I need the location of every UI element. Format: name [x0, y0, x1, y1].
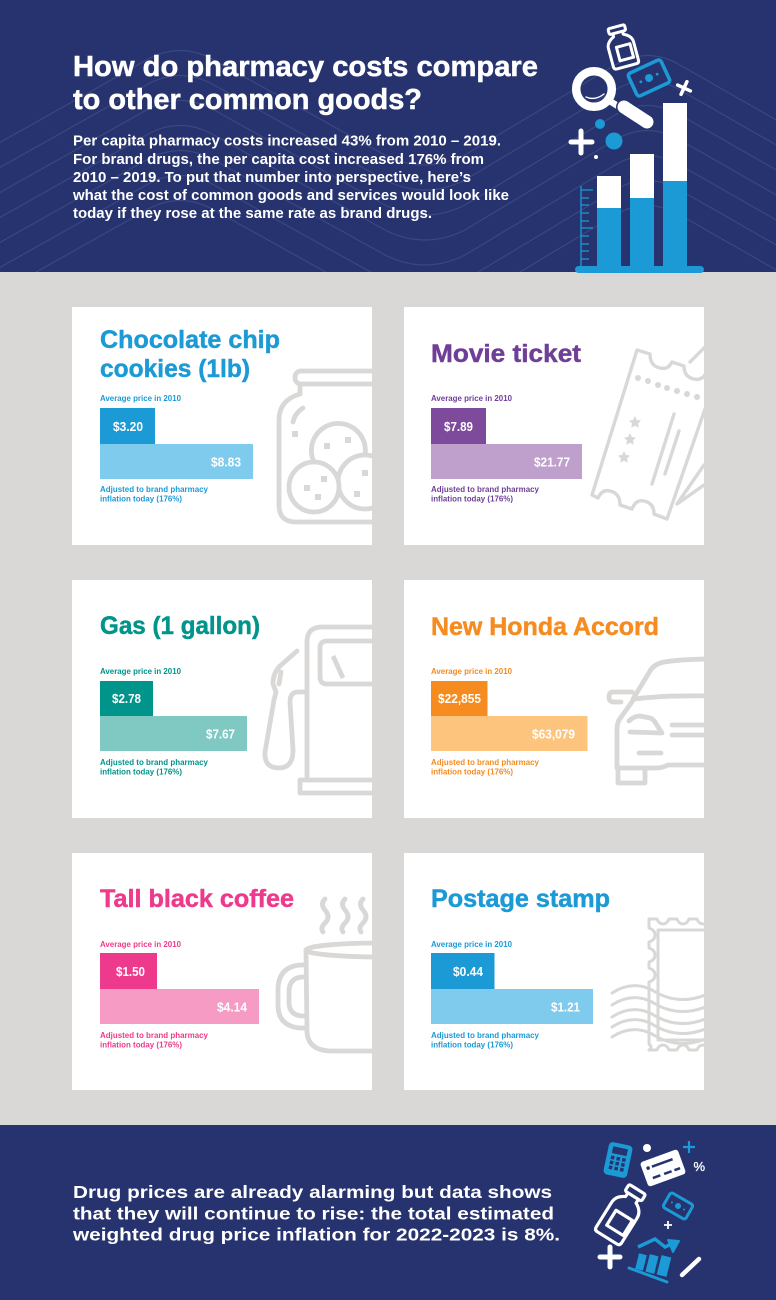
label: adjusted price: Adjusted to brand pharmacy	[100, 758, 209, 767]
label: adjusted price: Adjusted to brand pharmacy	[431, 1031, 540, 1040]
intro text: Per capita pharmacy costs increased 43% from 2010 – 2019.	[73, 134, 501, 150]
label: adjusted price: inflation today (176%)	[100, 768, 182, 776]
panel: new honda accord	[404, 580, 712, 818]
bar chart: $1.50	[116, 965, 145, 979]
icon: ticket	[592, 342, 716, 519]
heading: Postage stamp	[431, 886, 610, 913]
heading: Chocolate chip	[100, 327, 280, 354]
label: adjusted price: inflation today (176%)	[100, 1040, 182, 1050]
icon: stamp with postmark	[612, 919, 712, 1050]
panel: postage stamp	[404, 853, 712, 1090]
heading: cookies (1lb)	[100, 356, 250, 383]
icon: gas pump	[265, 627, 380, 793]
plus signs, dots, percent and slash	[600, 1141, 706, 1275]
heading	[100, 327, 280, 383]
bar chart: $22,855	[438, 692, 481, 706]
bar chart: $7.67	[206, 728, 235, 742]
footer text	[72, 1182, 560, 1244]
plus signs, dots, percent and slash: %	[694, 1159, 706, 1174]
label: average price: Average price in 2010	[431, 394, 513, 403]
bar chart: $21.77	[534, 456, 570, 470]
intro text	[72, 134, 509, 222]
title: to other common goods?	[73, 84, 422, 116]
bars	[575, 103, 704, 273]
heading: Movie ticket	[431, 341, 581, 368]
icon: pill bottle	[594, 1181, 650, 1246]
label: average price: Average price in 2010	[100, 940, 182, 949]
bar chart	[100, 681, 247, 751]
decorative plus signs and dots	[571, 79, 693, 159]
icon: cookie jar	[276, 368, 372, 524]
panel: tall black coffee	[72, 853, 372, 1090]
panel: movie ticket	[404, 307, 716, 545]
bar chart: $3.20	[113, 420, 143, 434]
bar chart	[100, 953, 259, 1024]
bar chart: $1.21	[551, 1000, 580, 1014]
label: adjusted price: inflation today (176%)	[100, 494, 182, 504]
bar chart	[431, 408, 582, 479]
label: average price: Average price in 2010	[431, 667, 513, 676]
bar chart: $0.44	[453, 965, 483, 979]
bar chart: $4.14	[217, 1000, 247, 1014]
bar chart: $7.89	[444, 420, 473, 434]
icon: magnifier	[576, 71, 647, 122]
header banner	[0, 0, 776, 272]
intro text: 2010 – 2019. To put that number into perspective, here’s	[73, 170, 471, 186]
label: adjusted price: Adjusted to brand pharmacy	[431, 758, 540, 767]
icon: money	[627, 59, 671, 97]
bar chart	[431, 953, 593, 1024]
ruler	[581, 186, 593, 267]
icon: rising bar chart with magnifier and pill bottle	[571, 23, 704, 273]
icon: growth chart	[629, 1239, 679, 1282]
icon: money	[662, 1192, 694, 1220]
footer text: that they will continue to rise: the total estimated	[73, 1204, 554, 1224]
footer banner	[0, 1125, 776, 1300]
label: adjusted price	[431, 1031, 540, 1050]
icon: finance and medicine cluster	[594, 1141, 706, 1282]
icon: pill bottle	[604, 23, 639, 70]
icon: car	[609, 659, 712, 783]
panel: gas	[72, 580, 380, 818]
bar chart	[431, 681, 588, 751]
label: adjusted price	[100, 485, 209, 504]
title	[73, 51, 538, 116]
label: adjusted price: Adjusted to brand pharmacy	[100, 485, 209, 494]
label: adjusted price: Adjusted to brand pharmacy	[431, 485, 540, 494]
footer text: weighted drug price inflation for 2022-2023 is 8%.	[72, 1224, 560, 1244]
label: average price: Average price in 2010	[431, 940, 513, 949]
heading: Gas (1 gallon)	[100, 613, 260, 640]
label: adjusted price: Adjusted to brand pharmacy	[100, 1031, 209, 1040]
label: adjusted price	[431, 485, 540, 504]
intro text: what the cost of common goods and services would look like	[72, 188, 509, 204]
icon: credit card	[640, 1149, 686, 1187]
label: average price: Average price in 2010	[100, 394, 182, 403]
icon: coffee mug	[276, 896, 372, 1054]
label: adjusted price: inflation today (176%)	[431, 494, 513, 504]
bar chart	[100, 408, 253, 479]
heading: New Honda Accord	[431, 614, 659, 641]
label: adjusted price	[431, 758, 540, 776]
intro text: For brand drugs, the per capita cost increased 176% from	[73, 152, 484, 168]
bar chart: $2.78	[112, 692, 141, 706]
icon: calculator	[603, 1141, 633, 1179]
label: adjusted price	[100, 758, 209, 776]
panel: chocolate chip cookies	[72, 307, 405, 545]
label: adjusted price: inflation today (176%)	[431, 768, 513, 776]
intro text: today if they rose at the same rate as brand drugs.	[73, 206, 432, 222]
title: How do pharmacy costs compare	[73, 51, 538, 83]
bar chart: $8.83	[211, 456, 241, 470]
heading: Tall black coffee	[100, 886, 294, 913]
label: adjusted price	[100, 1031, 209, 1050]
footer text: Drug prices are already alarming but data shows	[73, 1182, 552, 1202]
bar chart: $63,079	[532, 728, 575, 742]
label: average price: Average price in 2010	[100, 667, 182, 676]
label: adjusted price: inflation today (176%)	[431, 1040, 513, 1050]
